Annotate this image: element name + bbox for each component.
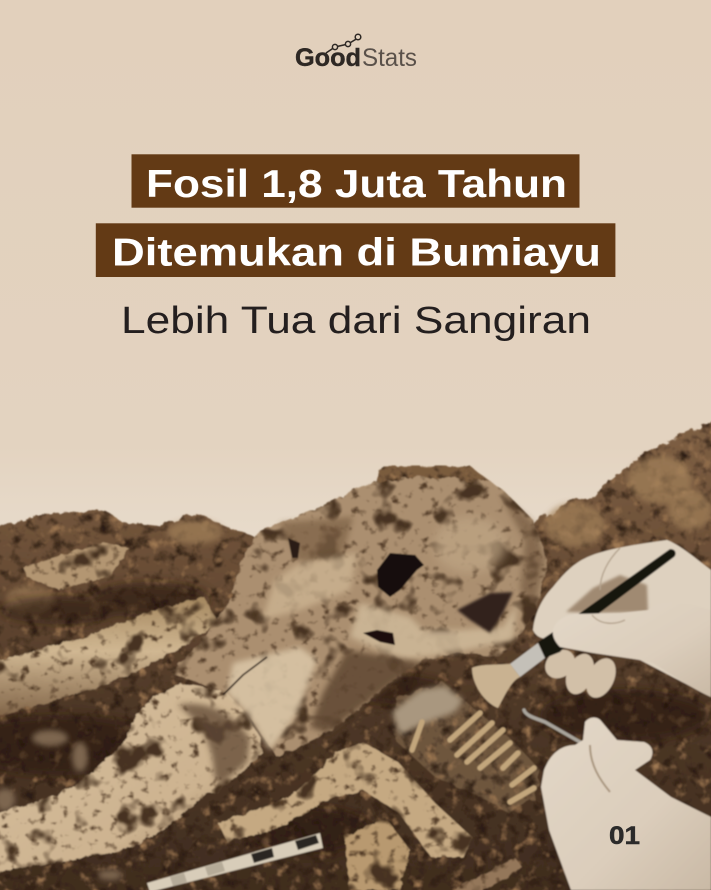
skull xyxy=(170,466,547,757)
bottom bone shard xyxy=(453,858,523,890)
under snout shadow xyxy=(310,650,420,733)
bone fragment xyxy=(345,817,410,890)
upper tusk xyxy=(0,597,218,718)
soil ground xyxy=(0,418,711,890)
glove inner shade xyxy=(566,575,648,613)
snout crack xyxy=(223,657,267,695)
arch highlight xyxy=(350,603,517,660)
title line 1: Fosil 1,8 Juta Tahun xyxy=(146,163,567,206)
lower glove xyxy=(541,718,711,890)
title line 2: Ditemukan di Bumiayu xyxy=(112,232,601,274)
loose stones xyxy=(0,730,122,880)
GoodStats logo xyxy=(295,34,417,72)
nasal opening xyxy=(363,630,395,645)
lower fingers xyxy=(539,644,622,703)
steel probe tool xyxy=(524,710,580,742)
jaw teeth bone xyxy=(392,683,540,812)
snout lower highlight xyxy=(227,647,317,750)
brush bristles xyxy=(472,664,520,708)
brush handle xyxy=(538,549,676,658)
title line 2 xyxy=(96,223,615,277)
tusk sheath shadow xyxy=(178,704,250,785)
title line 1 xyxy=(132,154,580,208)
glove crease xyxy=(592,548,625,623)
brush ferrule xyxy=(510,643,545,677)
dark soil shadow areas xyxy=(0,582,710,852)
thumb and back of glove xyxy=(533,540,711,697)
lower tusk xyxy=(0,683,263,873)
measuring scale xyxy=(147,833,323,890)
curved limb bone xyxy=(218,742,472,857)
skull dark rim xyxy=(500,495,545,605)
eye socket xyxy=(377,553,424,597)
lit soil clods xyxy=(6,456,711,614)
page number: 01 xyxy=(609,822,640,850)
small skull hole xyxy=(288,538,300,558)
subtitle: Lebih Tua dari Sangiran xyxy=(121,300,591,342)
GoodStats logo: Good xyxy=(295,44,361,72)
excavation illustration xyxy=(0,418,711,890)
left soil rock xyxy=(23,542,129,590)
rear socket xyxy=(457,592,513,633)
upper glove holding brush xyxy=(472,540,711,708)
index finger and palm xyxy=(553,602,711,697)
mid snout light xyxy=(262,553,357,620)
GoodStats logo: Stats xyxy=(362,44,417,72)
snout bridge shade xyxy=(280,517,353,563)
cranium light xyxy=(434,517,506,573)
skull soil crust xyxy=(375,466,490,482)
